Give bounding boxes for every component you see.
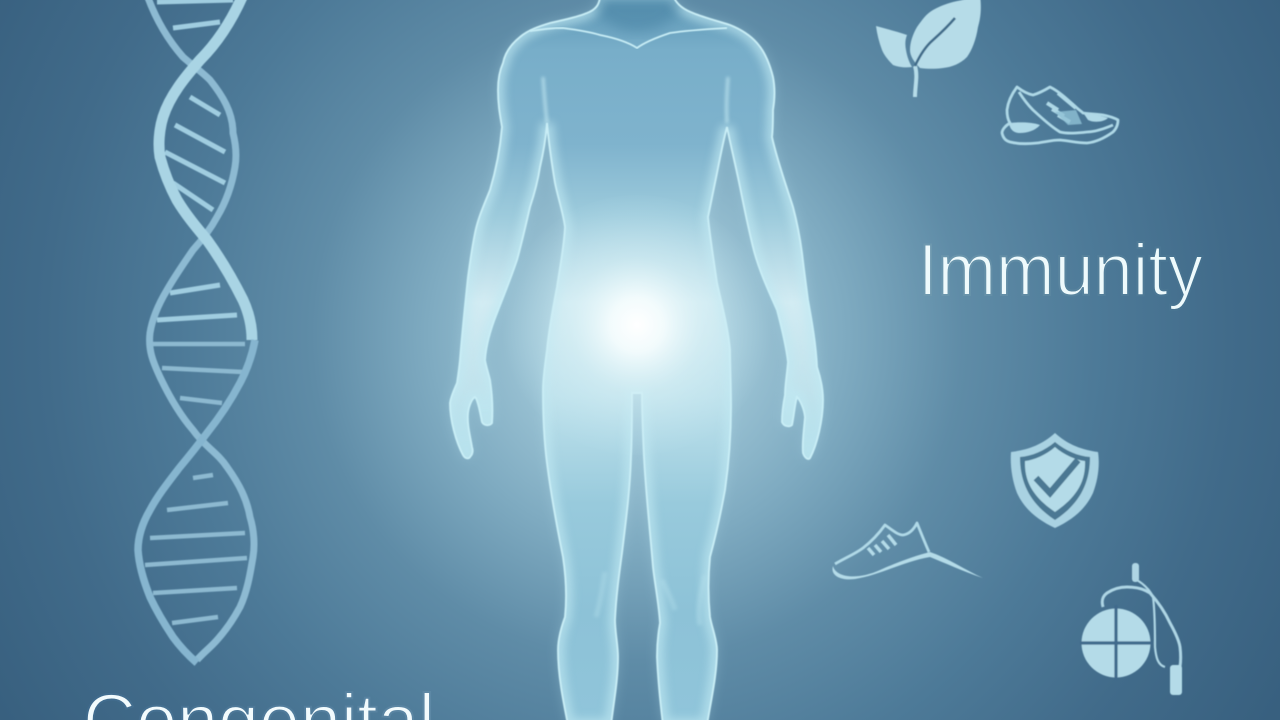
icon: DNA double helix: [138, 0, 255, 663]
knee highlights: [596, 572, 705, 625]
icon: running shoe: [832, 523, 983, 579]
body inner rim light: [450, 0, 823, 720]
icon: shield with check: [1011, 433, 1099, 528]
icon: sneaker outline: [1002, 87, 1118, 144]
human body figure: [450, 0, 823, 720]
DNA lower strand: [138, 340, 255, 663]
DNA back strand: [147, 0, 254, 660]
collar line: [530, 28, 727, 48]
core light glow: [502, 195, 772, 455]
shoe sole: [832, 552, 983, 579]
icon: round device with cable: [1080, 563, 1182, 695]
shoe laces: [868, 535, 896, 555]
shoulder crease lines: [543, 77, 728, 123]
icon: leaf: [876, 0, 981, 97]
label: Immunity: Immunity: [918, 230, 1203, 311]
neck shadow: [590, 0, 685, 32]
DNA base-pair rungs, lower: [145, 344, 247, 623]
shoe upper: [835, 523, 929, 564]
body silhouette: [450, 0, 823, 720]
DNA base-pair rungs, upper: [157, 0, 237, 320]
body outline: [450, 0, 823, 720]
DNA front strand: [159, 0, 252, 340]
body outer halo: [450, 0, 823, 720]
